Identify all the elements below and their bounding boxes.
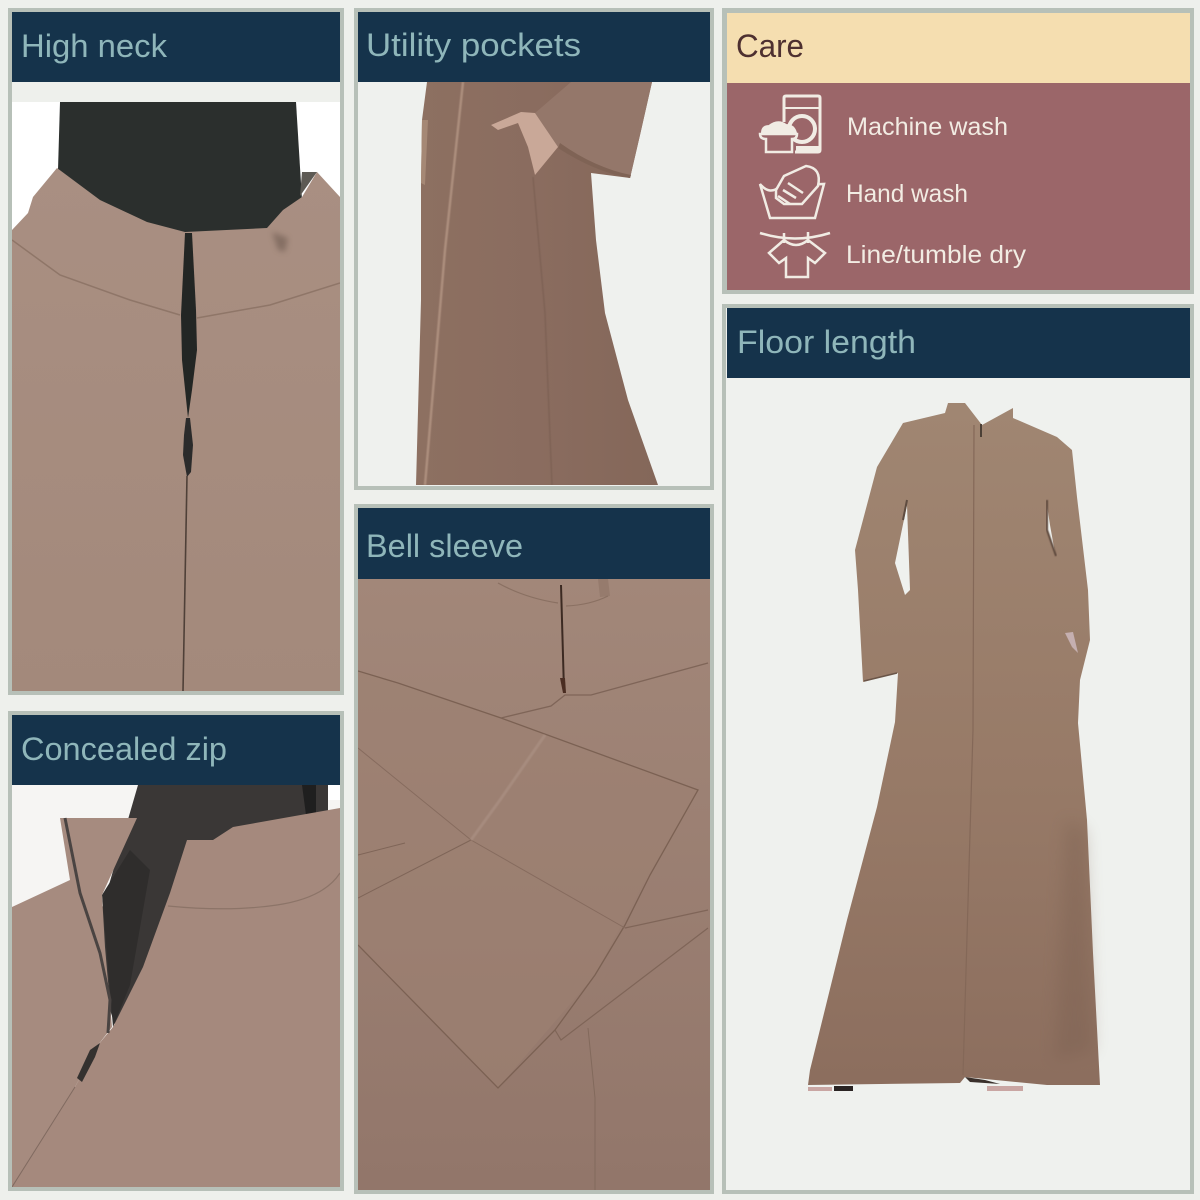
icon: line dry: [760, 232, 830, 277]
header: utility pockets: Utility pockets: [366, 27, 581, 63]
label: line dry: Line/tumble dry: [846, 241, 1027, 269]
icon: hand wash: [760, 166, 824, 218]
panel: bell sleeve: [356, 506, 712, 1192]
figure: floor-length dress: [808, 403, 1100, 1091]
photo: utility pockets detail: [416, 82, 658, 485]
panel: floor length: [724, 306, 1192, 1192]
photo: high neck detail: [12, 102, 340, 691]
label: hand wash: Hand wash: [846, 180, 968, 208]
header: floor length: [727, 308, 1190, 378]
header: concealed zip: Concealed zip: [21, 731, 227, 767]
photo: concealed zip detail: [12, 785, 340, 1187]
label: machine wash: Machine wash: [847, 113, 1008, 141]
header: bell sleeve: Bell sleeve: [366, 528, 523, 564]
header: care: Care: [736, 28, 804, 64]
panel: care: [724, 10, 1192, 292]
panel: concealed zip: [10, 713, 342, 1189]
header: bell sleeve: [358, 508, 710, 579]
panel: high neck: [10, 10, 342, 693]
photo: bell sleeve detail: [358, 579, 710, 1190]
header: care: [727, 13, 1190, 83]
header: floor length: Floor length: [737, 324, 916, 360]
header: utility pockets: [358, 12, 710, 82]
panel: utility pockets: [356, 10, 712, 488]
icon: machine wash: [760, 96, 820, 152]
header: high neck: High neck: [21, 28, 168, 64]
header: high neck: [12, 12, 340, 82]
header: concealed zip: [12, 715, 340, 785]
